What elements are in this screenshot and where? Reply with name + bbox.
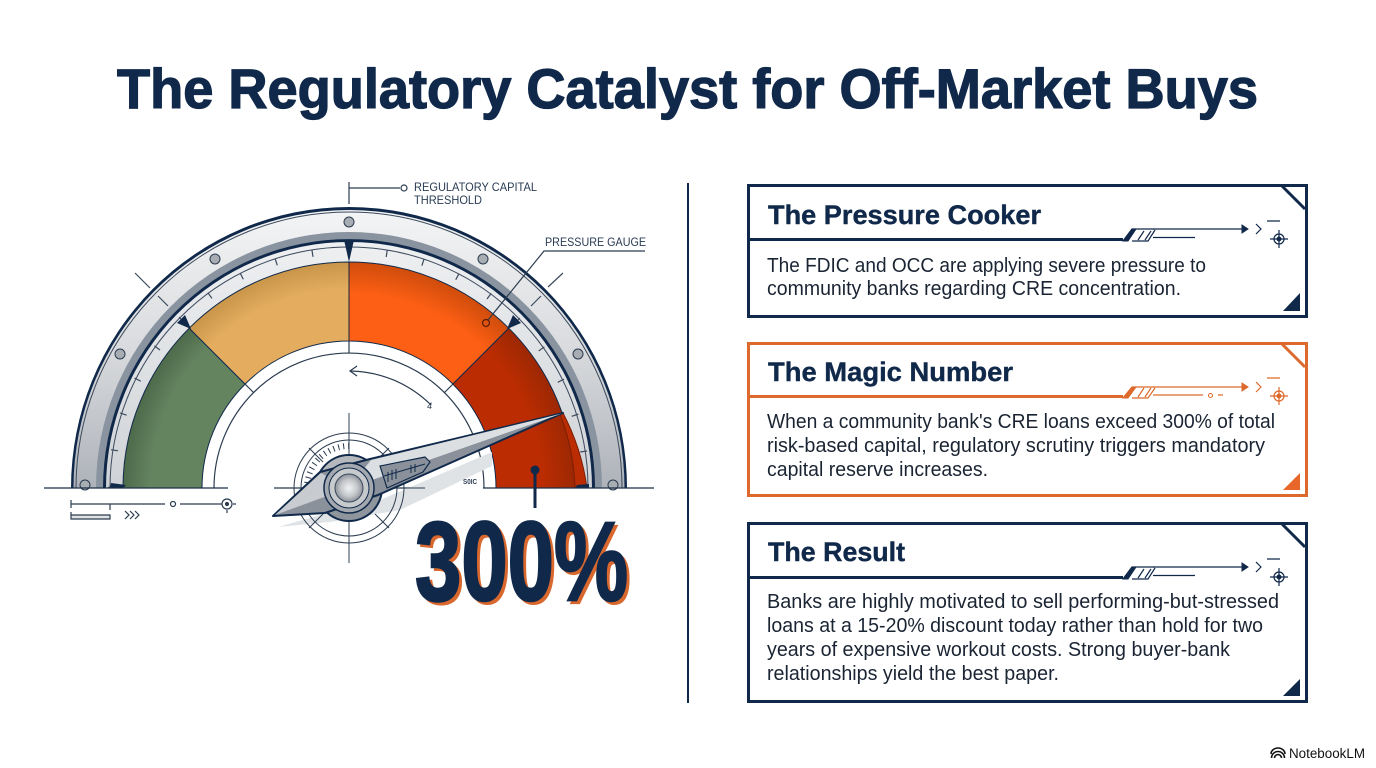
- inner scale arc: [214, 341, 484, 488]
- gauge needle: [273, 413, 563, 516]
- bottom-left scale detail: [71, 499, 236, 519]
- body text: relationships yield the best paper.: [767, 663, 1059, 685]
- corner cut: [1282, 186, 1305, 209]
- panel: pressure gauge illustration: [44, 180, 654, 627]
- panel: the pressure cooker: [748, 186, 1306, 316]
- callout: pressure gauge: [482, 235, 646, 326]
- corner triangle: [1283, 679, 1300, 696]
- header rule and arrow ornament: [749, 559, 1288, 586]
- body text: Banks are highly motivated to sell performing-but-stressed: [767, 591, 1279, 613]
- callout: pressure gauge: PRESSURE GAUGE: [545, 235, 646, 249]
- brand mark: NotebookLM: NotebookLM: [1289, 746, 1365, 761]
- corner cut: [1282, 344, 1305, 367]
- body text: When a community bank's CRE loans exceed 300% of total: [767, 411, 1275, 433]
- gauge zone: green: [123, 328, 245, 488]
- callout: regulatory capital threshold: REGULATORY CAPITAL: [414, 180, 537, 194]
- header rule and arrow ornament: [749, 221, 1288, 248]
- body text: [767, 255, 1206, 300]
- corner cut: [1282, 524, 1305, 547]
- red overrun sliver past needle: [560, 413, 587, 488]
- needle shadow: [278, 452, 492, 527]
- needle hub: [315, 454, 383, 522]
- zone markers: [110, 240, 589, 488]
- callout: regulatory capital threshold: THRESHOLD: [414, 193, 482, 207]
- small scale label: S0IC: [463, 479, 477, 486]
- needle hub cap: [324, 463, 374, 513]
- callout: regulatory capital threshold: [349, 180, 537, 207]
- corner triangle: [1283, 473, 1300, 490]
- body text: community banks regarding CRE concentration.: [767, 278, 1181, 300]
- gauge zone: orange: [349, 262, 509, 384]
- big number: 300%: 300%: [415, 499, 628, 624]
- panel: the result: [748, 524, 1306, 702]
- header rule and arrow ornament: [749, 378, 1288, 405]
- body text: The FDIC and OCC are applying severe pressure to: [767, 255, 1206, 277]
- body text: [767, 591, 1279, 685]
- body text: capital reserve increases.: [767, 459, 988, 481]
- baseline: [44, 487, 654, 489]
- heading: The Result: [768, 537, 905, 567]
- gauge zone: amber: [189, 262, 349, 384]
- body text: risk-based capital, regulatory scrutiny triggers mandatory: [767, 435, 1265, 457]
- heading: The Pressure Cooker: [768, 200, 1041, 230]
- gauge zone: red: [453, 328, 575, 488]
- panel: the magic number: [748, 344, 1306, 496]
- vertical divider: [687, 183, 689, 703]
- hub crosshair dial: [274, 413, 425, 563]
- small arc glyph: 4: [427, 401, 432, 411]
- corner triangle: [1283, 293, 1300, 311]
- gauge outer metal bezel: [71, 207, 627, 488]
- direction arrow: [350, 366, 431, 405]
- big number: 300%: 300%: [418, 502, 631, 627]
- heading: The Magic Number: [768, 357, 1013, 387]
- body text: loans at a 15-20% discount today rather than hold for two: [767, 615, 1263, 637]
- threshold pointer: [530, 466, 540, 508]
- bezel screws: [80, 217, 618, 490]
- body text: years of expensive workout costs. Strong buyer-bank: [767, 639, 1231, 661]
- body text: [767, 411, 1275, 481]
- title: The Regulatory Catalyst for Off-Market Buys: [117, 57, 1258, 120]
- bezel index ticks: [135, 273, 563, 306]
